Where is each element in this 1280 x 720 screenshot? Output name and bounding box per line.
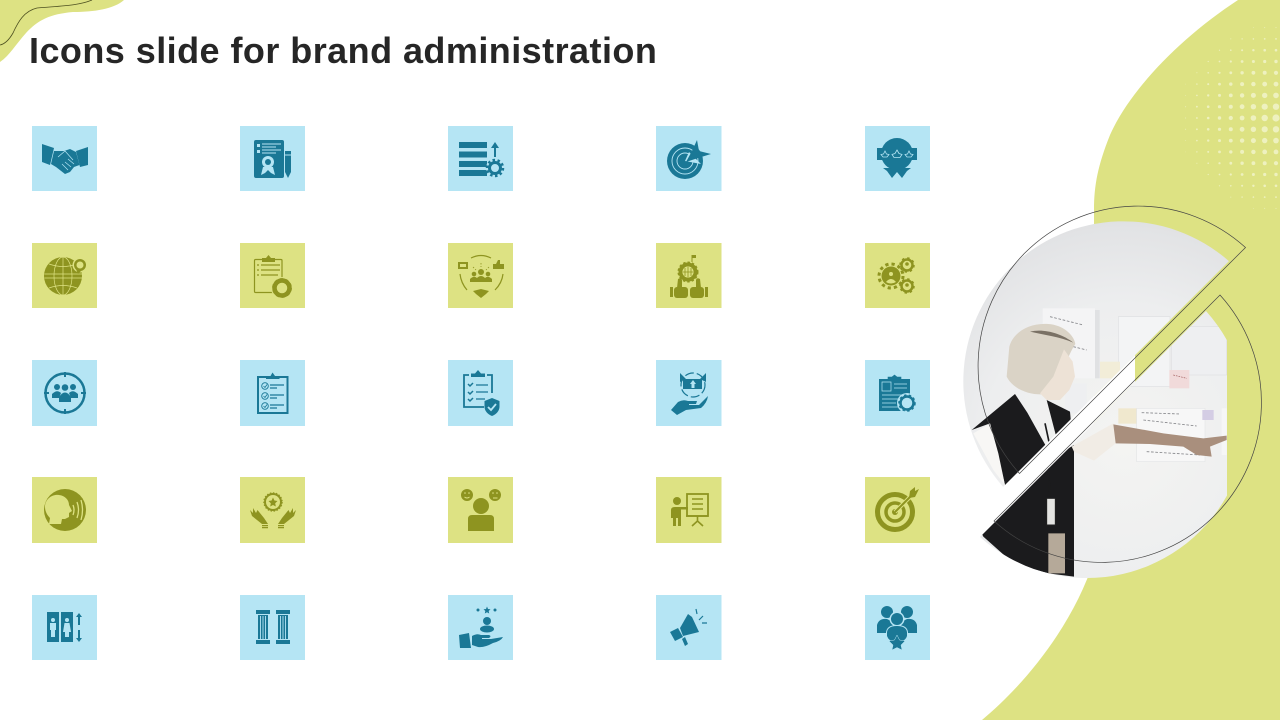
icon: hand holding money <box>656 360 722 426</box>
icon: two pillars <box>240 595 305 660</box>
icon: megaphone <box>656 595 722 660</box>
icon: elevator with people <box>32 595 97 660</box>
thin outline: upper half circle <box>978 206 1246 473</box>
halftone dot pattern <box>1185 27 1280 209</box>
icon: person with happy and sad faces <box>448 477 513 543</box>
icon: team with star <box>865 595 930 660</box>
decorative blob: right side <box>982 0 1280 720</box>
icon: thumbs up around global gear <box>656 243 722 308</box>
icon: presenter at board <box>656 477 722 543</box>
title: Icons slide for brand administration <box>29 30 657 70</box>
icon: handshake <box>32 126 97 191</box>
icon: team feedback circle <box>448 243 513 308</box>
icon: clipboard with shield <box>448 360 513 426</box>
icon: three gears with people <box>865 243 930 308</box>
icon: certificate and pencil <box>240 126 305 191</box>
thin outline: lower half circle <box>994 295 1261 562</box>
white diagonal band between photo halves <box>1090 355 1135 427</box>
icon: clipboard with gear <box>240 243 305 308</box>
icon: award badge with stars <box>865 126 930 191</box>
icon: bullseye with arrow <box>865 477 930 543</box>
photo: presenter pointing at whiteboard <box>964 221 1229 578</box>
icon: financial clipboard with gear <box>865 360 930 426</box>
icon grid <box>32 126 930 660</box>
icon: hand holding person with stars <box>448 595 513 660</box>
icon: clipboard checklist <box>240 360 305 426</box>
decorative blob: top left <box>0 0 124 62</box>
icon: hands holding star medal <box>240 477 305 543</box>
icon: target on team <box>32 360 97 426</box>
icon: list with arrow and gear <box>448 126 513 191</box>
icon: head speaking <box>32 477 97 543</box>
icon: globe with location pin <box>32 243 97 308</box>
icon: target with spike <box>656 126 722 191</box>
